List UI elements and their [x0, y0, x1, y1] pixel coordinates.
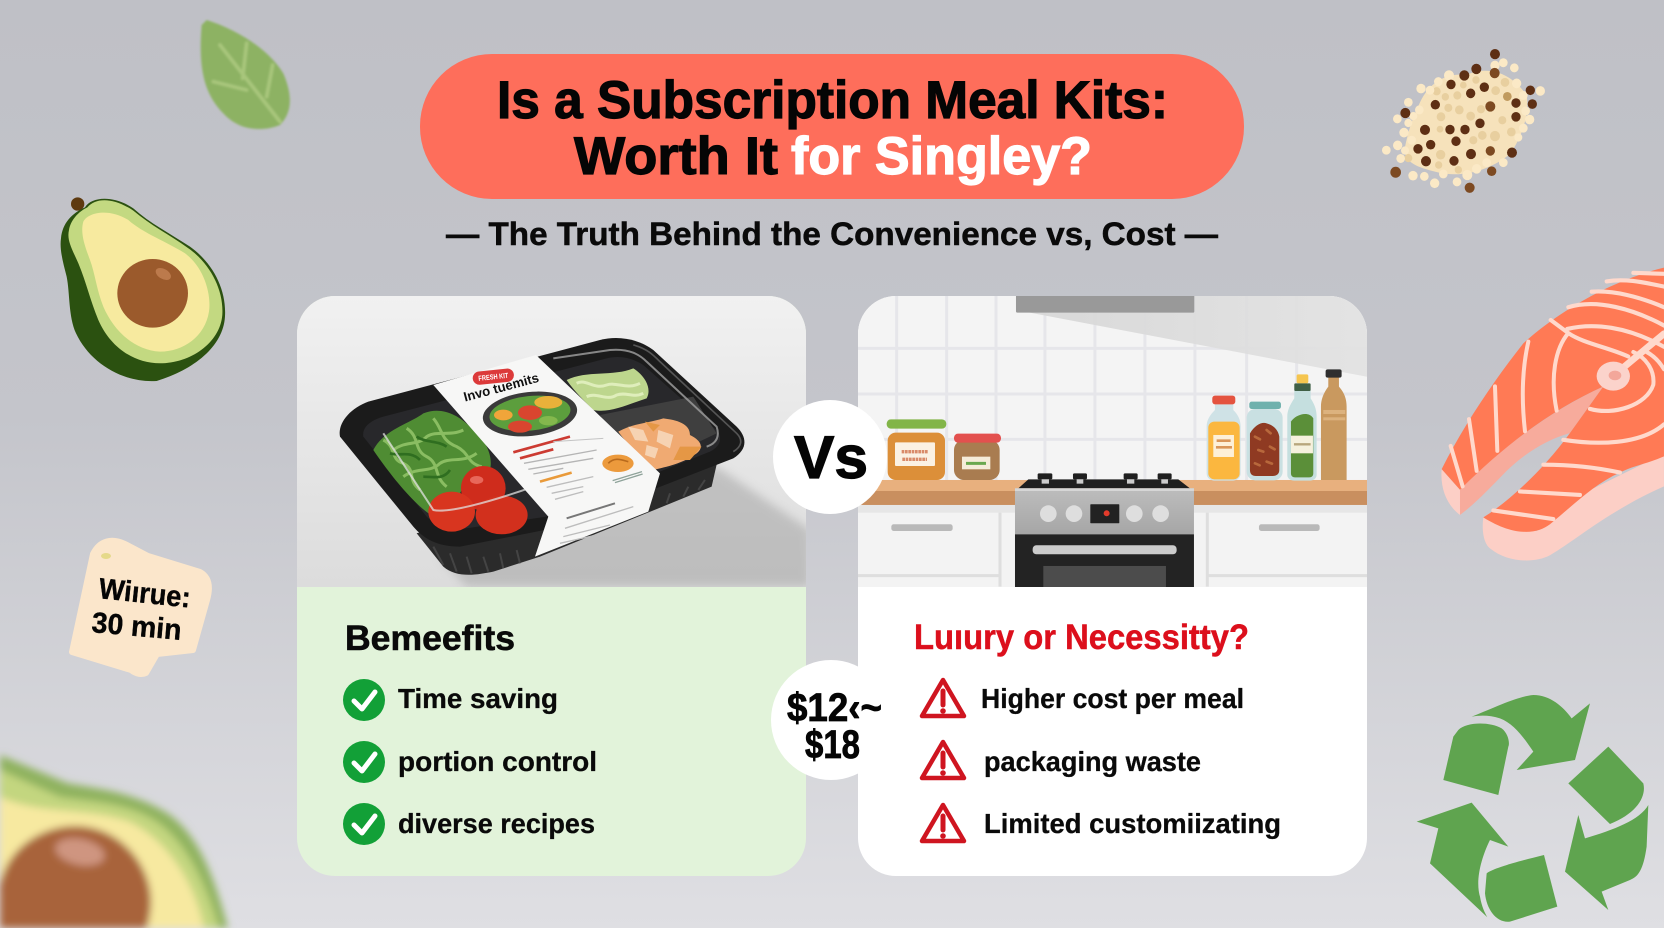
- icon: avocado half: [61, 197, 225, 381]
- tray body: [416, 464, 717, 575]
- benefit: portion control: [343, 741, 597, 783]
- icon: leaf: [201, 20, 290, 129]
- panel: luxury or necessity: [850, 290, 1370, 876]
- range hood: [1030, 296, 1367, 376]
- drawback: limited customization: Limited customiizating: [984, 808, 1281, 839]
- vs badge: Vs: [794, 424, 868, 491]
- jar: beans: [1247, 402, 1283, 480]
- panel: benefits: [297, 296, 810, 876]
- benefit: time saving: [343, 679, 558, 721]
- benefit: time saving: Time saving: [398, 683, 558, 714]
- icon: salmon steak: [1441, 268, 1664, 560]
- meal kit photo: FRESH KIT: [478, 371, 509, 383]
- title banner: [420, 54, 1244, 199]
- callout: time note: [72, 541, 209, 674]
- benefit: diverse recipes: diverse recipes: [398, 808, 595, 839]
- vs badge: [773, 400, 887, 514]
- countertop: [876, 480, 1367, 491]
- benefit: diverse recipes: [343, 803, 595, 845]
- bottle: green oil: [1287, 374, 1317, 481]
- title line 1: Is a Subscription Meal Kits:: [497, 71, 1168, 130]
- price badge: [771, 660, 891, 780]
- price badge: $12‹~: [787, 686, 882, 730]
- meal kit photo: Invo tuemits: [462, 370, 540, 405]
- price badge: $18: [805, 723, 860, 767]
- tomatoes: [461, 466, 506, 511]
- meal kit photo: [297, 296, 810, 587]
- jar: brown: [954, 434, 1001, 480]
- drawback: higher cost: [922, 680, 1244, 716]
- bowl: [482, 392, 578, 436]
- subtitle: — The Truth Behind the Convenience vs, Cost —: [446, 216, 1218, 252]
- cabinets: [850, 513, 1370, 589]
- benefits heading: Bemeefits: [345, 619, 515, 658]
- bottle: orange sauce: [1207, 396, 1241, 481]
- label fine print: [513, 437, 570, 458]
- callout: time note: 30 min: [90, 607, 183, 647]
- icon: quinoa pile: [1382, 49, 1545, 193]
- kitchen illustration: [850, 290, 1370, 589]
- icon: blurred avocado corner: [0, 755, 228, 928]
- bottle: amber: [1321, 369, 1347, 480]
- orange chunks: [618, 418, 701, 470]
- title line 2 black: Worth It: [574, 127, 778, 186]
- warning heading: Luıury or Necessitty?: [914, 618, 1249, 657]
- jar: orange: [887, 419, 946, 480]
- drawback: packaging waste: [922, 742, 1201, 778]
- title line 2 white: for Singley?: [791, 127, 1092, 186]
- icon: recycle symbol: [1417, 695, 1648, 922]
- tray rim: [340, 338, 744, 547]
- callout: time note: Wiırue:: [97, 573, 192, 615]
- stove: [1015, 473, 1194, 589]
- pale greens: [567, 368, 649, 411]
- drawback: higher cost: Higher cost per meal: [981, 683, 1244, 714]
- salad: [373, 411, 491, 513]
- drawback: packaging waste: packaging waste: [984, 746, 1201, 777]
- sleeve label: [433, 355, 660, 557]
- benefit: portion control: portion control: [398, 746, 597, 777]
- tray well: [363, 357, 720, 529]
